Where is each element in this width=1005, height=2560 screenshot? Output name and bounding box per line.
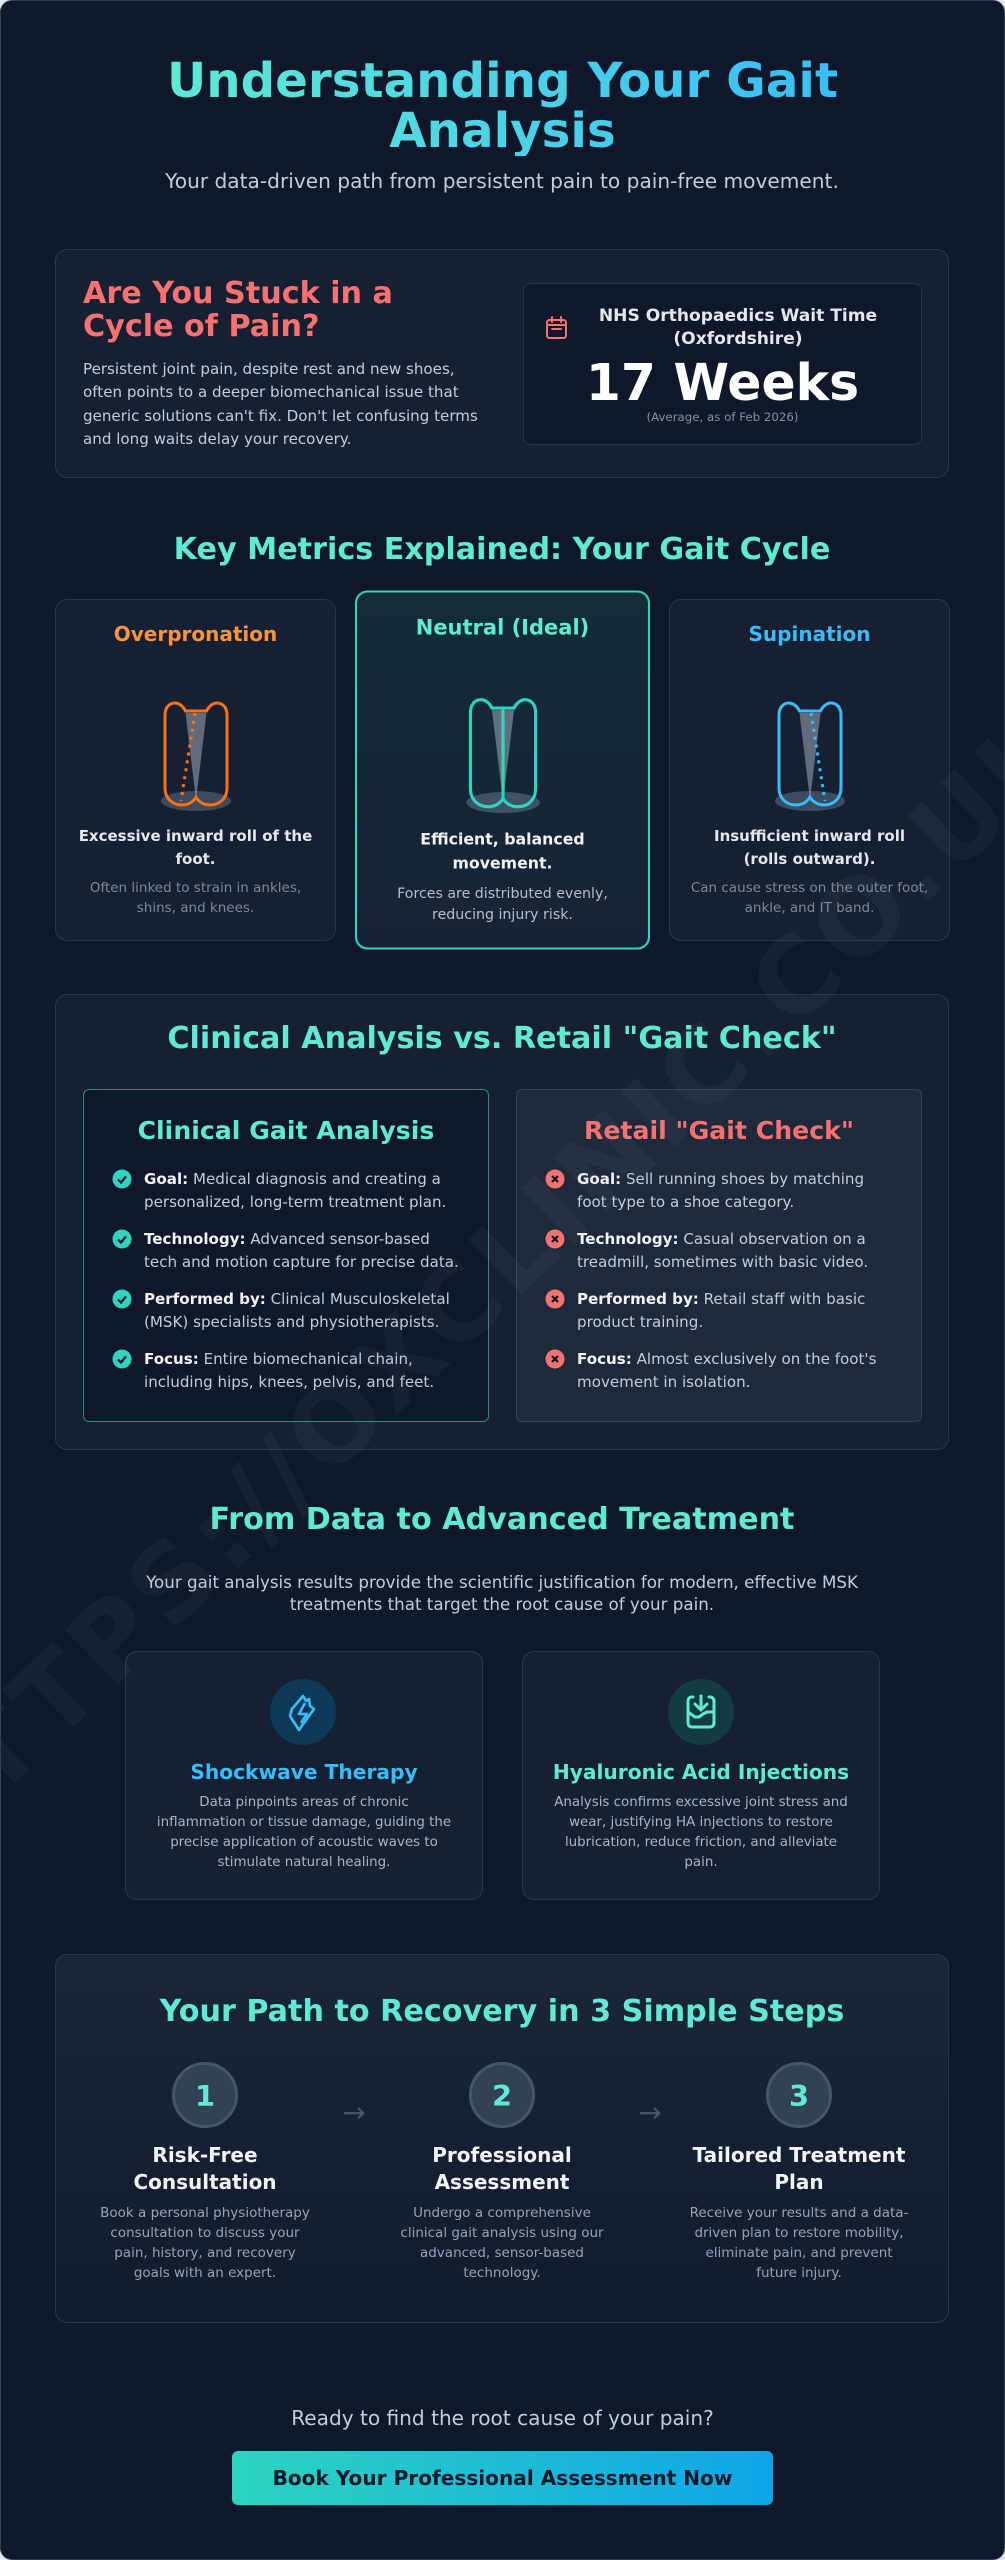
step 1 title: Risk-Free [152, 2143, 258, 2167]
clinical focus [144, 1350, 434, 1391]
retail technology: Technology: Casual observation on a [577, 1230, 866, 1248]
icon: check technology [112, 1230, 132, 1248]
heading: data to treatment: From Data to Advanced Treatment [210, 1502, 794, 1537]
icon: overpronation foot [161, 702, 231, 811]
panel: overpronation [55, 599, 336, 941]
text: treatment intro: treatments that target the root cause of your pain. [290, 1594, 714, 1614]
text: treatment intro: Your gait analysis results provide the scientific justification for modern, effective MSK [146, 1572, 858, 1592]
clinical technology: tech and motion capture for precise data. [144, 1253, 459, 1271]
step 2 number [469, 2062, 535, 2128]
neutral detail [397, 886, 608, 924]
text: pain description [83, 360, 478, 448]
clinical focus: including hips, knees, pelvis, and feet. [144, 1373, 434, 1391]
title: Analysis [389, 103, 616, 159]
panel: cycle of pain [55, 249, 949, 478]
heading: shockwave therapy: Shockwave Therapy [190, 1760, 418, 1784]
step 3 number [766, 2062, 832, 2128]
icon: neutral foot [466, 698, 540, 813]
heading: are you stuck [83, 276, 393, 344]
neutral title: Neutral (Ideal) [416, 615, 589, 640]
retail focus: movement in isolation. [577, 1373, 750, 1391]
step 3 title: Tailored Treatment [693, 2143, 905, 2167]
retail focus [577, 1350, 876, 1391]
step 3 title [654, 2142, 944, 2195]
title [167, 56, 838, 156]
heading: recovery steps: Your Path to Recovery in 3 Simple Steps [160, 1994, 844, 2029]
list: retail points [546, 1170, 876, 1391]
retail goal: Goal: Sell running shoes by matching [577, 1170, 864, 1188]
heading: retail gait check: Retail "Gait Check" [584, 1116, 854, 1145]
icon: calendar [546, 316, 567, 339]
icon: cross focus [546, 1350, 564, 1368]
panel: retail gait check [516, 1089, 922, 1422]
call to action button: Book Your Professional Assessment Now [273, 2466, 732, 2490]
wait time label: NHS Orthopaedics Wait Time [599, 306, 877, 326]
supination summary: (rolls outward). [744, 850, 875, 868]
overpronation summary: Excessive inward roll of the [79, 827, 312, 845]
text: shockwave description [157, 1795, 451, 1870]
step 1 title [133, 2143, 277, 2194]
panel: hyaluronic acid injections [522, 1651, 880, 1900]
retail performed by [577, 1290, 865, 1331]
clinical focus: Focus: Entire biomechanical chain, [144, 1350, 413, 1368]
retail technology: treadmill, sometimes with basic video. [577, 1253, 868, 1271]
icon: injection [668, 1679, 734, 1745]
neutral detail: reducing injury risk. [432, 907, 573, 924]
clinical goal [144, 1170, 446, 1211]
text: shockwave description: Data pinpoints areas of chronic [199, 1795, 409, 1810]
icon: cross technology [546, 1230, 564, 1248]
overpronation title: Overpronation [114, 622, 277, 646]
heading: clinical vs retail: Clinical Analysis vs. Retail "Gait Check" [167, 1021, 837, 1056]
supination detail [691, 880, 928, 916]
step 1 description: Book a personal physiotherapy [100, 2205, 310, 2221]
neutral detail: Forces are distributed evenly, [397, 886, 608, 902]
text: pain description: generic solutions can't fix. Don't let confusing terms [83, 407, 478, 425]
icon: check performed by [112, 1290, 132, 1308]
icon: check focus [112, 1350, 132, 1368]
retail technology [577, 1230, 868, 1271]
overpronation detail [90, 880, 301, 916]
text: hyaluronic description: pain. [684, 1855, 718, 1870]
step 1 description: pain, history, and recovery [114, 2245, 296, 2261]
neutral summary [420, 830, 585, 873]
overpronation summary [79, 827, 312, 868]
text: shockwave description: inflammation or tissue damage, guiding the [157, 1815, 451, 1830]
step 3 title: Plan [774, 2170, 824, 2194]
panel: clinical gait analysis [83, 1089, 489, 1422]
clinical performed by [144, 1290, 450, 1331]
step 2 title [432, 2143, 572, 2194]
step 2 title: Assessment [435, 2170, 569, 2194]
heading: are you stuck: Cycle of Pain? [83, 308, 319, 344]
step 2 description: advanced, sensor-based [420, 2245, 584, 2261]
list: clinical points [112, 1170, 459, 1391]
panel: recovery steps [55, 1954, 949, 2323]
heading: are you stuck: Are You Stuck in a [83, 276, 393, 311]
step 3 description: future injury. [756, 2265, 842, 2281]
overpronation detail: Often linked to strain in ankles, [90, 880, 301, 896]
retail performed by: Performed by: Retail staff with basic [577, 1290, 865, 1308]
step 1 number: 1 [195, 2079, 215, 2113]
wait time label: (Oxfordshire) [673, 329, 803, 349]
step 3 number: 3 [789, 2079, 809, 2113]
text: pain description: often points to a deeper biomechanical issue that [83, 383, 459, 401]
neutral summary: Efficient, balanced [420, 830, 585, 849]
icon: shockwave [270, 1679, 336, 1745]
step 1 description: consultation to discuss your [110, 2225, 300, 2241]
retail focus: Focus: Almost exclusively on the foot's [577, 1350, 876, 1368]
step 2 description: Undergo a comprehensive [413, 2205, 591, 2221]
supination detail: Can cause stress on the outer foot, [691, 880, 928, 896]
heading: key metrics: Key Metrics Explained: Your Gait Cycle [174, 532, 830, 567]
supination detail: ankle, and IT band. [745, 900, 874, 916]
step 1 number [172, 2062, 238, 2128]
step 1 description [100, 2205, 310, 2281]
supination summary [714, 827, 905, 868]
text: pain description: and long waits delay your recovery. [83, 430, 351, 448]
icon: cross goal [546, 1170, 564, 1188]
clinical performed by: (MSK) specialists and physiotherapists. [144, 1313, 439, 1331]
neutral summary: movement. [452, 854, 553, 873]
text: shockwave description: stimulate natural healing. [218, 1855, 390, 1870]
icon: cross performed by [546, 1290, 564, 1308]
retail goal [577, 1170, 864, 1211]
text: hyaluronic description: lubrication, reduce friction, and alleviate [565, 1835, 837, 1850]
panel: neutral ideal [355, 590, 650, 950]
panel: supination [669, 599, 950, 941]
icon: supination foot [775, 702, 845, 811]
supination summary: Insufficient inward roll [714, 827, 905, 845]
step 3 description: Receive your results and a data- [690, 2205, 908, 2221]
arrow: step 1 to 2: → [342, 2096, 366, 2129]
supination title: Supination [749, 622, 870, 646]
retail performed by: product training. [577, 1313, 703, 1331]
text: hyaluronic description [554, 1795, 848, 1870]
panel: clinical vs retail [55, 994, 949, 1450]
stat note: (Average, as of Feb 2026) [646, 410, 799, 424]
wait time label [599, 306, 877, 349]
title: Understanding Your Gait [167, 53, 838, 109]
step 2 number: 2 [492, 2079, 512, 2113]
clinical performed by: Performed by: Clinical Musculoskeletal [144, 1290, 450, 1308]
step 1 description: goals with an expert. [134, 2265, 276, 2281]
text: hyaluronic description: wear, justifying HA injections to restore [569, 1815, 833, 1830]
call to action button [232, 2451, 773, 2505]
step 3 description: driven plan to restore mobility, [694, 2225, 904, 2241]
step 2 description [400, 2205, 604, 2281]
subtitle: Your data-driven path from persistent pain to pain-free movement. [165, 169, 839, 193]
clinical goal: Goal: Medical diagnosis and creating a [144, 1170, 441, 1188]
clinical technology [144, 1230, 459, 1271]
step 1 title: Consultation [133, 2170, 277, 2194]
stat: 17 weeks: 17 Weeks [586, 353, 859, 412]
clinical goal: personalized, long-term treatment plan. [144, 1193, 446, 1211]
heading: clinical gait analysis: Clinical Gait Analysis [138, 1116, 434, 1145]
text: treatment intro [146, 1572, 858, 1614]
arrow: step 2 to 3: → [638, 2096, 662, 2129]
heading: hyaluronic acid injections: Hyaluronic Acid Injections [553, 1760, 849, 1784]
step 2 title: Professional [432, 2143, 572, 2167]
step 3 description [654, 2203, 944, 2283]
step 3 description: eliminate pain, and prevent [705, 2245, 893, 2261]
overpronation detail: shins, and knees. [137, 900, 254, 916]
callout: NHS wait time [523, 283, 922, 445]
overpronation summary: foot. [175, 850, 216, 868]
clinical technology: Technology: Advanced sensor-based [144, 1230, 430, 1248]
text: hyaluronic description: Analysis confirms excessive joint stress and [554, 1795, 848, 1810]
call to action prompt: Ready to find the root cause of your pain? [291, 2406, 714, 2430]
panel: shockwave therapy [125, 1651, 483, 1900]
icon: check goal [112, 1170, 132, 1188]
retail goal: foot type to a shoe category. [577, 1193, 794, 1211]
text: shockwave description: precise application of acoustic waves to [170, 1835, 438, 1850]
step 2 description: technology. [463, 2265, 541, 2281]
step 2 description: clinical gait analysis using our [400, 2225, 604, 2241]
text: pain description: Persistent joint pain, despite rest and new shoes, [83, 360, 455, 378]
